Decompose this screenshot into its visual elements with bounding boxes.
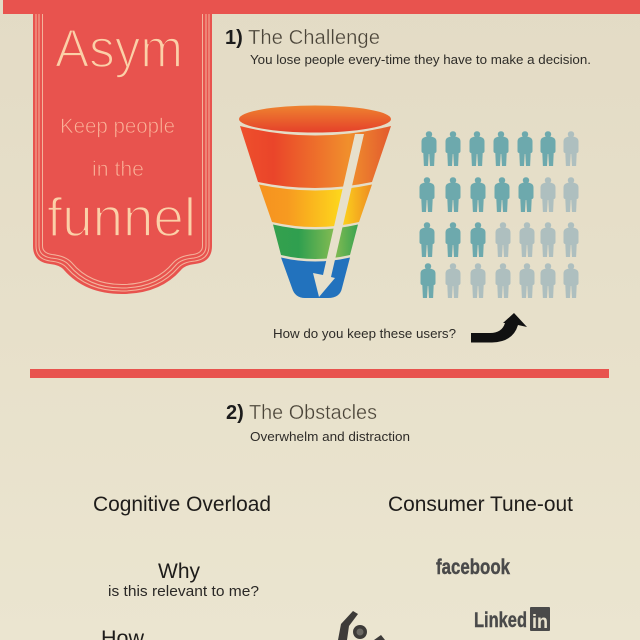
funnel chart — [239, 106, 391, 298]
question text: How do you keep these users? — [273, 326, 456, 341]
banner: Asym keep people in the funnel: funnel — [47, 186, 196, 248]
banner: Asym keep people in the funnel: in the — [92, 158, 144, 181]
heading: 1) The Challenge: 1) — [225, 27, 243, 49]
heading: 1) The Challenge: The Challenge — [248, 26, 380, 49]
top red bar — [3, 0, 640, 14]
question: Why — [108, 560, 259, 600]
lost users — [446, 131, 578, 298]
banner: Asym keep people in the funnel: Asym — [55, 19, 183, 79]
subheading: Consumer Tune-out: Consumer Tune-out — [388, 493, 573, 516]
obstacles description: Overwhelm and distraction — [250, 429, 410, 444]
logo: LinkedIn: in — [532, 612, 548, 633]
people pictogram — [420, 131, 578, 298]
banner: Asym keep people in the funnel: Keep people — [60, 115, 175, 138]
red divider — [30, 369, 609, 378]
logo: facebook: facebook — [436, 556, 510, 579]
banner: Asym keep people in the funnel — [33, 14, 212, 294]
logo: LinkedIn: Linked — [474, 609, 527, 632]
question: Why: Why — [158, 560, 200, 583]
question: Why: is this relevant to me? — [108, 583, 259, 600]
retained users — [420, 131, 556, 298]
heading: 2) The Obstacles: The Obstacles — [249, 401, 377, 424]
heading: 2) The Obstacles: 2) — [226, 402, 244, 424]
funnel arrow — [313, 134, 364, 297]
subheading: Cognitive Overload: Cognitive Overload — [93, 493, 271, 516]
challenge description: You lose people every-time they have to make a decision. — [250, 52, 591, 67]
black curved arrow — [471, 313, 527, 342]
icon: overwhelmed figure — [338, 611, 385, 640]
